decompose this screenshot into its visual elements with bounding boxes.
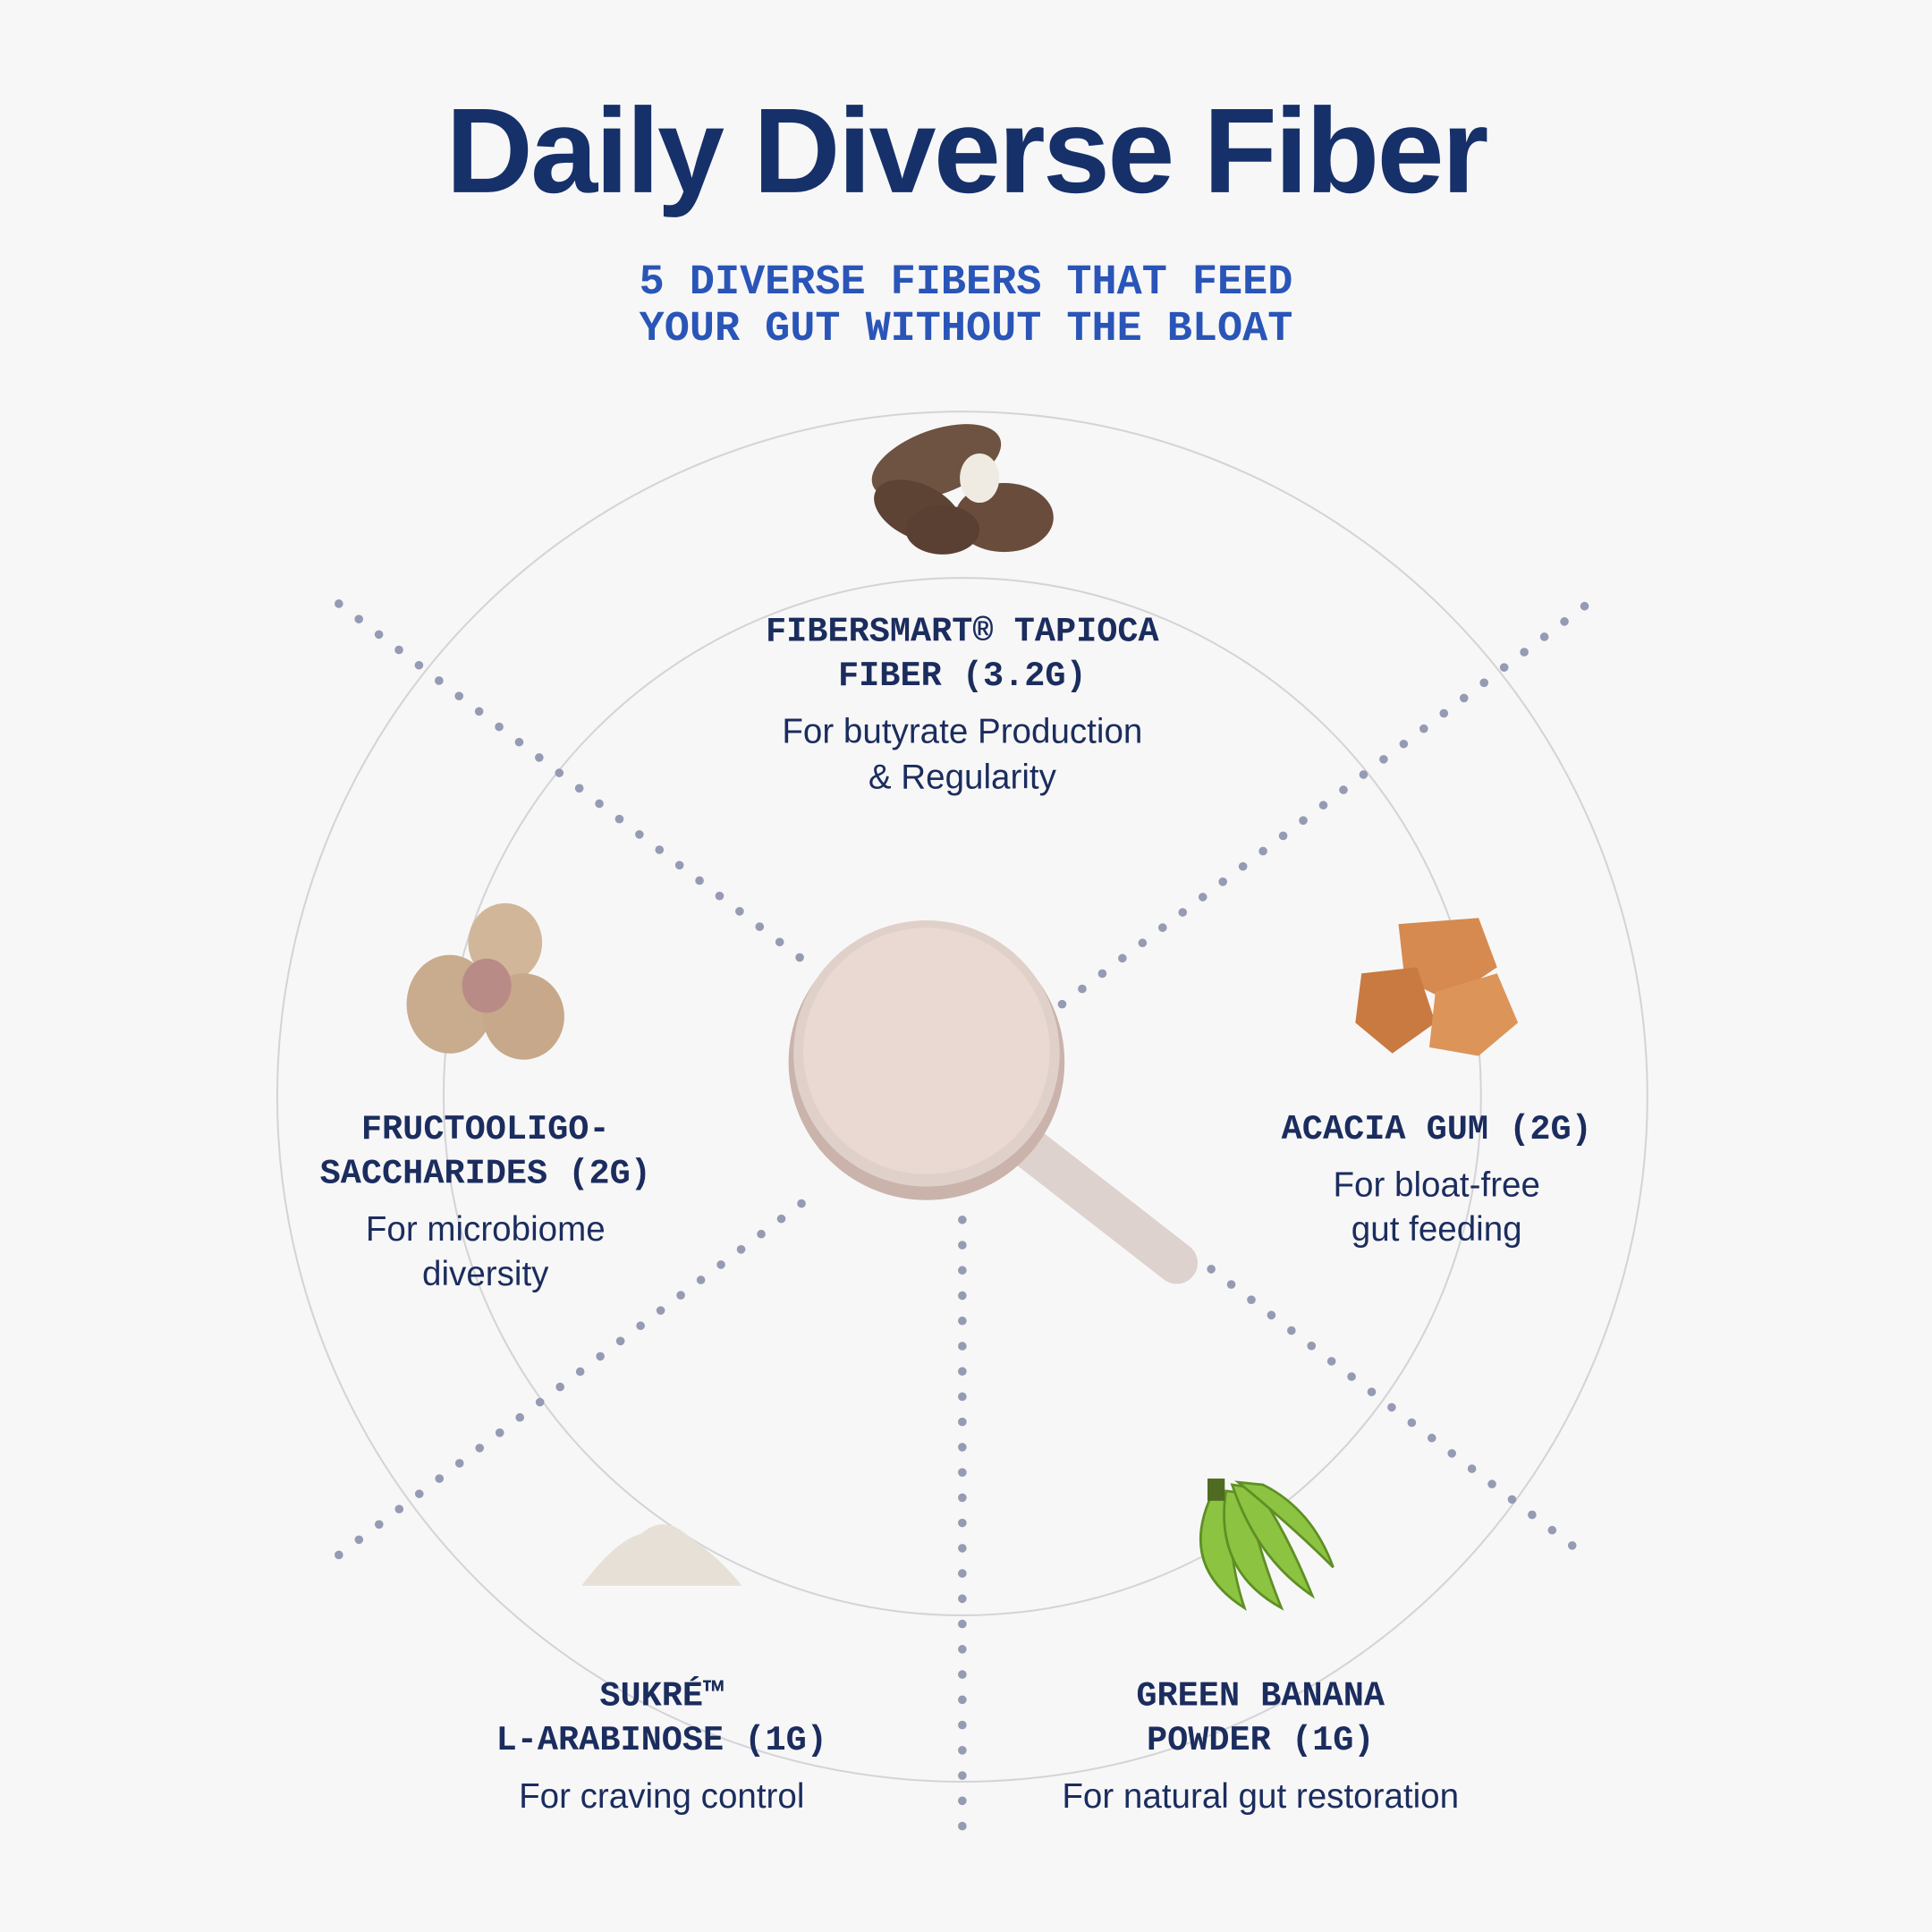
text: acacia: gut feeding [1352, 1210, 1522, 1249]
icon: tapioca root [861, 409, 1054, 555]
text: acacia: For bloat-free [1333, 1166, 1540, 1205]
subtitle [640, 259, 1292, 353]
text: FOS: SACCHARIDES (2G) [320, 1154, 651, 1193]
icon: acacia gum [1355, 918, 1518, 1056]
subtitle: YOUR GUT WITHOUT THE BLOAT [640, 306, 1292, 353]
text: tapioca: FIBER (3.2G) [838, 657, 1087, 696]
text: tapioca: FIBERSMART® TAPIOCA [766, 612, 1160, 651]
text: green banana [1062, 1677, 1459, 1816]
text: green banana: POWDER (1G) [1147, 1721, 1375, 1760]
icon: chicory root [407, 903, 564, 1060]
text: green banana: GREEN BANANA [1136, 1677, 1385, 1716]
text: acacia [1282, 1110, 1592, 1249]
text: FOS [320, 1110, 651, 1293]
subtitle: 5 DIVERSE FIBERS THAT FEED [640, 259, 1292, 307]
text: sukre: For craving control [519, 1777, 804, 1816]
text: sukre [496, 1676, 827, 1816]
text: tapioca [766, 612, 1160, 797]
text: FOS: FRUCTOOLIGO- [361, 1110, 610, 1149]
text: tapioca: & Regularity [869, 758, 1057, 797]
text: green banana: For natural gut restoration [1062, 1777, 1459, 1816]
title: Daily Diverse Fiber [445, 83, 1487, 218]
text: FOS: diversity [422, 1255, 549, 1293]
text: sukre: SUKRÉ™ [599, 1676, 724, 1716]
icon: powder pile [581, 1524, 741, 1586]
text: acacia: ACACIA GUM (2G) [1282, 1110, 1592, 1149]
text: sukre: L-ARABINOSE (1G) [496, 1721, 827, 1760]
text: FOS: For microbiome [366, 1210, 606, 1249]
icon: green bananas [1200, 1479, 1334, 1608]
icon: scoop of fiber powder [789, 920, 1177, 1263]
text: tapioca: For butyrate Production [782, 713, 1142, 751]
